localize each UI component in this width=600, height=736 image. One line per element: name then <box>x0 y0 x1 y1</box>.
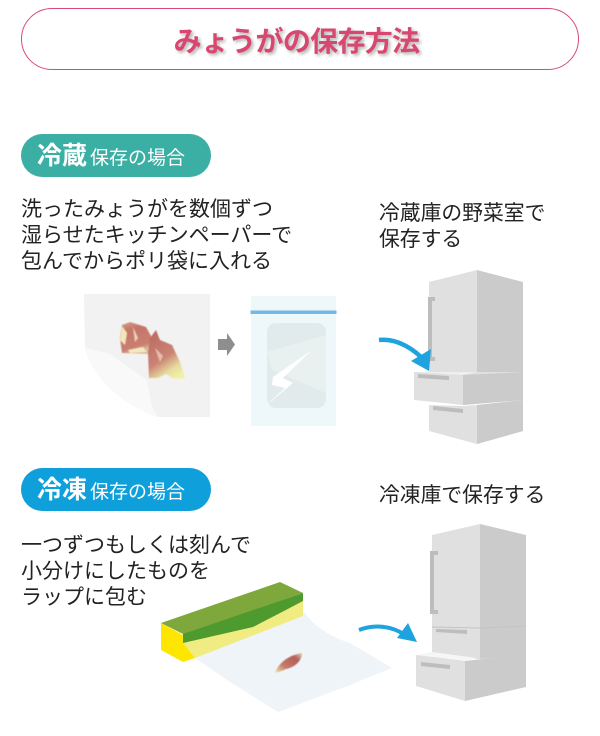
heading: frozen storage: 冷凍 <box>37 476 87 504</box>
text: refrigerated instructions: 洗ったみょうがを数個ずつ <box>21 198 273 221</box>
title text: みょうがの保存方法 <box>174 26 419 57</box>
text: vegetable compartment <box>379 202 545 251</box>
heading: frozen storage: 保存の場合 <box>90 482 185 503</box>
text: refrigerated instructions: 湿らせたキッチンペーパーで <box>21 224 292 247</box>
title banner <box>21 8 579 70</box>
text: vegetable compartment: 保存する <box>379 228 462 251</box>
heading: refrigerated storage <box>21 134 211 177</box>
heading: refrigerated storage: 冷蔵 <box>37 142 87 170</box>
text: freezer: 冷凍庫で保存する <box>379 484 545 507</box>
text: vegetable compartment: 冷蔵庫の野菜室で <box>379 202 545 225</box>
text: frozen instructions <box>21 534 251 609</box>
text: frozen instructions: ラップに包む <box>21 586 147 609</box>
text: frozen instructions: 小分けにしたものを <box>21 560 210 583</box>
text: refrigerated instructions <box>21 198 292 273</box>
heading: refrigerated storage: 保存の場合 <box>90 148 185 169</box>
text: frozen instructions: 一つずつもしくは刻んで <box>21 534 251 557</box>
myoga on wrap <box>275 653 302 673</box>
heading: frozen storage <box>21 468 211 511</box>
text: refrigerated instructions: 包んでからポリ袋に入れる <box>21 250 272 273</box>
